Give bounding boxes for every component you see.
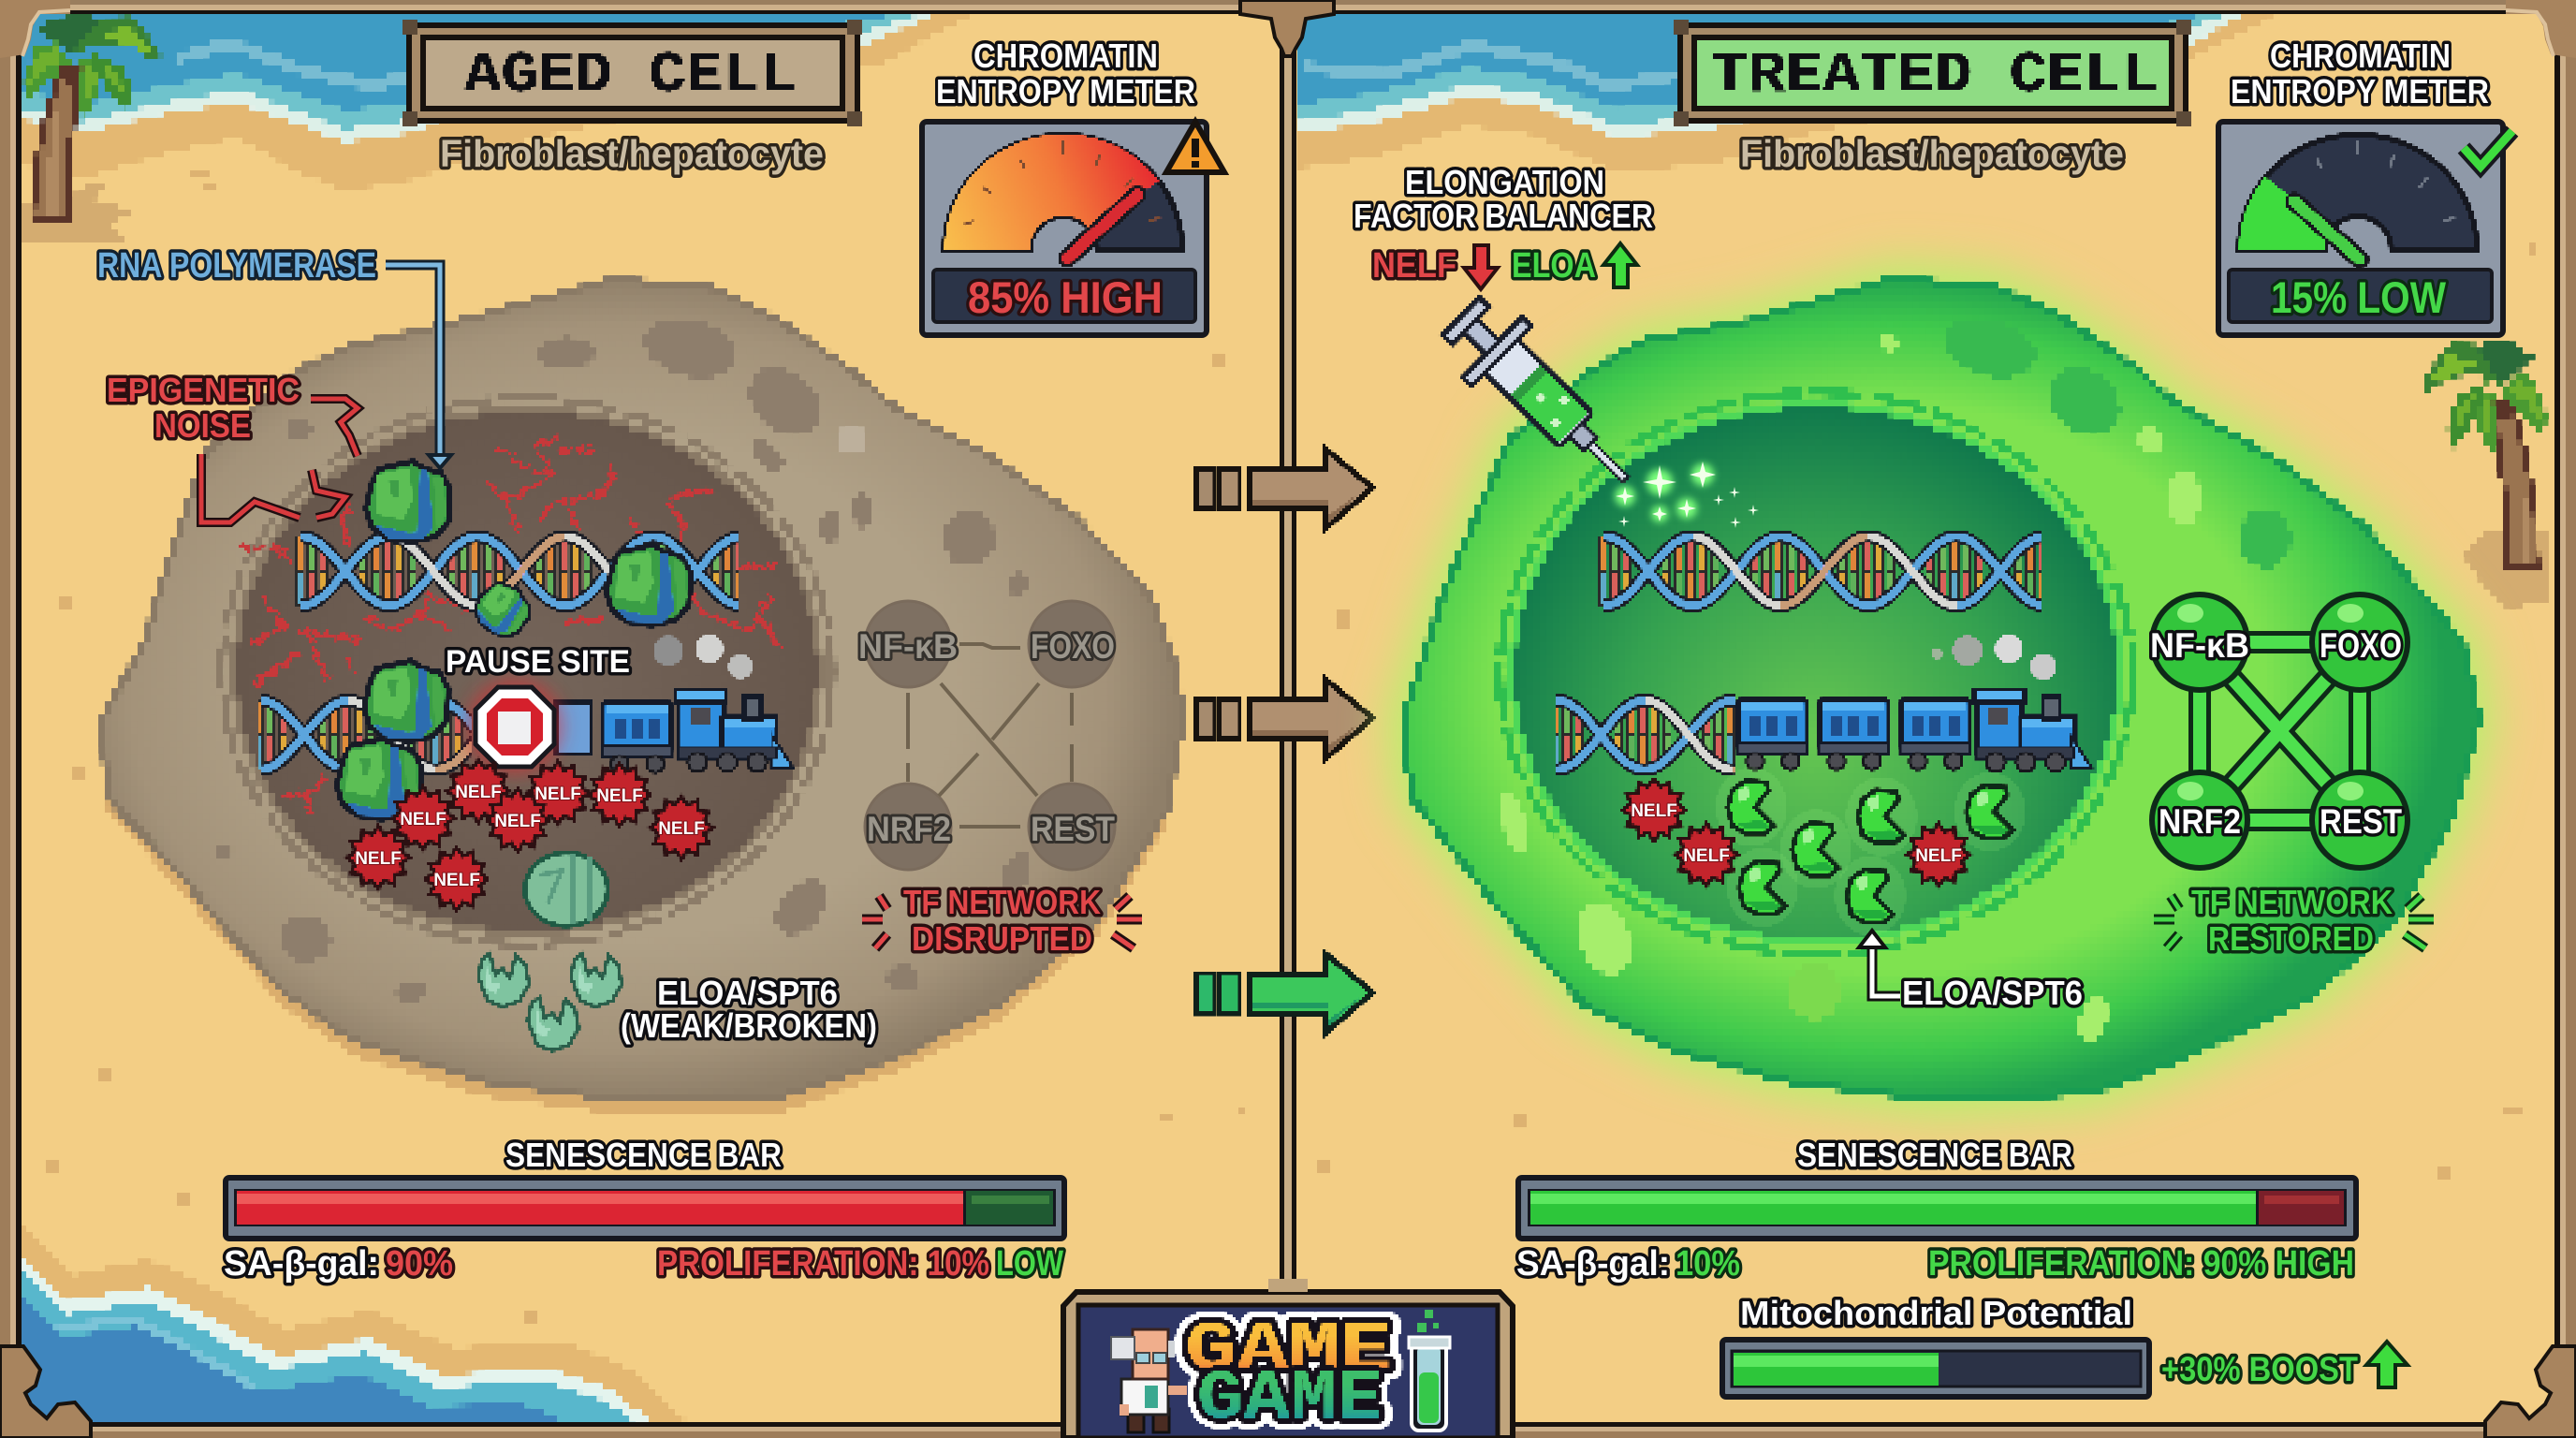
NELF cluster: pausing factors: NELF [433, 871, 480, 890]
logo wordmark: GAME [1185, 1312, 1392, 1390]
sand specks [47, 169, 2539, 1326]
gauge: entropy 85% high [922, 122, 1224, 335]
stop sign: pause site [466, 678, 564, 775]
TF network: restored: NF-κB [2150, 626, 2249, 665]
heading: chromatin entropy meter: CHROMATIN [973, 37, 1158, 75]
senescence bar: treated: PROLIFERATION: 90% HIGH [1928, 1244, 2354, 1284]
heading: chromatin entropy meter: ENTROPY METER [2231, 72, 2489, 110]
senescence bar: treated: SA-β-gal: [1516, 1244, 1670, 1284]
panel: treated cell [1354, 20, 2512, 1397]
treated cell body [1403, 279, 2479, 1100]
callout: RNA polymerase: RNA POLYMERASE [97, 246, 376, 286]
panel: aged cell [97, 20, 1224, 1284]
smoke puffs [653, 635, 753, 679]
senescence bar: treated: SENESCENCE BAR [1797, 1136, 2072, 1174]
label: pause site: PAUSE SITE [446, 644, 630, 680]
TF network: restored: FOXO [2320, 626, 2402, 665]
DNA helix: transcribed strand [1556, 694, 1735, 775]
epigenetic noise squiggles [242, 437, 782, 814]
callout: epigenetic noise [107, 371, 358, 522]
water: top left [21, 14, 973, 191]
senescence bar: aged [224, 1136, 1064, 1284]
TF network: restored: NRF2 [2159, 802, 2241, 841]
callout: ELOA/SPT6: ELOA/SPT6 [1902, 974, 2083, 1012]
icon: scientist [1111, 1329, 1187, 1432]
mitochondrial potential bar [1722, 1294, 2408, 1397]
NELF cluster: pausing factors: NELF [658, 819, 705, 839]
NELF cluster: pausing factors: NELF [400, 810, 446, 829]
NELF cluster: pausing factors: NELF [355, 849, 402, 869]
label: ELOA/SPT6 weak: (WEAK/BROKEN) [621, 1006, 877, 1045]
title plate: aged cell: AGED CELL [464, 42, 797, 109]
subtitle: cell type: Fibroblast/hepatocyte [440, 132, 824, 175]
weak ELOA/SPT6 fragments [478, 954, 622, 1050]
label: ELOA/SPT6 weak: ELOA/SPT6 [657, 974, 838, 1012]
callout: epigenetic noise: EPIGENETIC [107, 371, 300, 409]
RNA polymerase cluster [337, 462, 691, 819]
DNA helix: paused strand [258, 694, 472, 775]
NELF labels: NELF [1631, 801, 1677, 821]
senescence bar: aged: 90% [386, 1244, 453, 1284]
restored ELOA/SPT6 [1716, 768, 2026, 935]
label: ELOA/SPT6 weak [621, 974, 877, 1045]
icon: test tube [1409, 1310, 1450, 1431]
title plate: treated cell: TREATED CELL [1711, 42, 2159, 109]
treated nuclear contents [1527, 536, 2091, 935]
senescence bar: treated [1516, 1136, 2356, 1284]
DNA helix: upper strand restored [1574, 536, 2071, 606]
label: TF network disrupted: DISRUPTED [912, 919, 1092, 958]
arrow: middle [1196, 679, 1372, 759]
callout: ELOA/SPT6 [1859, 931, 2083, 1012]
heading: chromatin entropy meter: ENTROPY METER [936, 72, 1195, 110]
NELF cluster: pausing factors: NELF [534, 785, 581, 804]
elongation factor balancer: FACTOR BALANCER [1354, 197, 1653, 235]
aged cell body [103, 280, 1183, 1114]
elongation factor balancer [1354, 163, 1653, 289]
nuclear contents: noise, DNA, polymerases [230, 437, 793, 926]
elongation factor balancer: ELOA [1512, 246, 1596, 286]
NELF cluster: pausing factors: NELF [494, 812, 541, 831]
remaining NELF stars [1623, 779, 1969, 886]
DNA helix: upper strand [271, 536, 768, 606]
glow around treated cell [1403, 279, 2479, 1100]
gauge: entropy 85% high: 85% HIGH [968, 272, 1163, 322]
logo wordmark: GAME [1197, 1360, 1383, 1438]
injected sparkles [1615, 462, 1759, 528]
icon: warning triangle [1166, 122, 1224, 172]
gauge: entropy 15% low [2218, 122, 2512, 335]
logo wordmark [1185, 1312, 1392, 1438]
NELF cluster: pausing factors: NELF [596, 786, 643, 806]
gauge: entropy 15% low: 15% LOW [2271, 272, 2447, 322]
label: TF network restored [2154, 883, 2434, 958]
smoke puffs [1931, 635, 2056, 680]
arrow: top [1196, 448, 1372, 529]
TF network: disrupted: FOXO [1031, 627, 1115, 666]
senescence bar: aged: SENESCENCE BAR [505, 1136, 782, 1174]
transition arrows [1196, 448, 1372, 1034]
logo wordmark: GAME [1185, 1312, 1392, 1390]
NELF labels: NELF [1683, 846, 1730, 866]
TF network: disrupted: NRF2 [867, 810, 951, 848]
senescence bar: aged: SA-β-gal: [224, 1244, 379, 1284]
logo wordmark: GAME [1197, 1360, 1383, 1438]
palm tree: right [2422, 341, 2552, 609]
label: TF network disrupted [862, 883, 1142, 958]
TF network: disrupted: REST [1031, 810, 1115, 848]
heading: chromatin entropy meter [2231, 37, 2489, 110]
callout: RNA polymerase [97, 246, 451, 468]
train: stalled [556, 689, 793, 772]
senescence bar: treated: 10% [1676, 1244, 1740, 1284]
label: TF network restored: RESTORED [2208, 919, 2374, 958]
callout: epigenetic noise: NOISE [154, 406, 251, 445]
senescence bar: aged: PROLIFERATION: 10% [657, 1244, 989, 1284]
TF network: restored [2150, 594, 2408, 868]
water: bottom left [21, 1226, 691, 1425]
NELF cluster: pausing factors: NELF [455, 783, 502, 802]
arrow: bottom [1196, 953, 1372, 1034]
TF network: disrupted [858, 601, 1115, 870]
train: running [1738, 689, 2091, 771]
syringe [1431, 286, 1655, 509]
elongation factor balancer: NELF [1372, 246, 1456, 286]
mitochondrial potential bar: Mitochondrial Potential [1740, 1294, 2132, 1332]
logo plaque [1063, 1279, 1513, 1438]
heading: chromatin entropy meter: CHROMATIN [2270, 37, 2451, 75]
label: TF network disrupted: TF NETWORK [903, 883, 1101, 921]
TF network: disrupted: NF-κB [858, 627, 958, 666]
NELF cluster: pausing factors [347, 760, 712, 910]
NELF labels: NELF [1915, 846, 1962, 866]
label: TF network restored: TF NETWORK [2191, 883, 2393, 921]
elongation factor balancer: ELONGATION [1405, 163, 1604, 201]
water: top right [1296, 14, 2275, 172]
title plate: treated cell [1674, 20, 2191, 126]
palm tree: left [22, 14, 161, 243]
NELF labels [1631, 801, 1962, 866]
TF network: restored: REST [2320, 802, 2402, 841]
senescence bar: aged: LOW [996, 1244, 1063, 1284]
subtitle: cell type: Fibroblast/hepatocyte [1740, 132, 2124, 175]
mitochondrial potential bar: +30% BOOST [2161, 1350, 2358, 1388]
broken elongation complex in nucleus [525, 853, 607, 926]
heading: chromatin entropy meter [936, 37, 1195, 110]
icon: check mark [2464, 131, 2512, 167]
title plate: aged cell [402, 20, 862, 126]
